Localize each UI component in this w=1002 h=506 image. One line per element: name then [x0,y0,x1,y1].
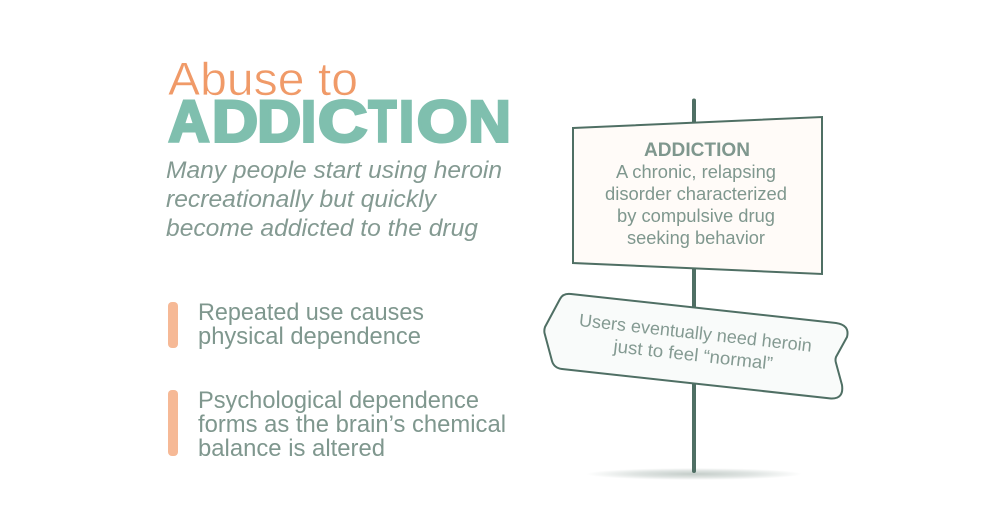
title: ADDICTION: D [257,90,301,154]
arrow board text: just to feel “normal” [612,336,774,374]
title: ADDICTION: T [368,90,396,154]
bullet text 2 [198,387,506,462]
bullet text 1: physical dependence [198,323,421,350]
arrow board text: Users eventually need heroin [578,310,813,356]
sign definition text: A chronic, relapsing [616,162,776,182]
bullet text 2: Psychological dependence [198,387,479,414]
bullet bar 2 [168,390,178,456]
bullet text 2: balance is altered [198,435,385,462]
sign board [573,117,822,274]
intro text: become addicted to the drug [166,215,479,242]
title: ADDICTION: A [168,90,210,154]
intro text: recreationally but quickly [166,186,438,213]
title: ADDICTION: O [417,90,468,154]
ground shadow [586,468,802,480]
intro text: Many people start using heroin [166,157,502,184]
title: ADDICTION: C [318,90,367,154]
bullet text 2: forms as the brain’s chemical [198,411,506,438]
title: ADDICTION: I [399,90,414,154]
signpost pole [692,100,696,471]
arrow board shape [544,294,848,399]
bullet text 1 [198,299,424,350]
bullet: physical dependence [168,299,424,350]
bullet text 1: Repeated use causes [198,299,424,326]
sign heading: ADDICTION [644,140,750,161]
intro text [166,157,502,242]
title: Abuse to: Abuse to [168,53,358,105]
sign definition text: disorder characterized [605,184,787,204]
title: ADDICTION: D [212,90,258,154]
sign: addiction definition [573,117,822,274]
title: ADDICTION: I [301,90,316,154]
sign definition text [605,162,787,248]
sign: arrow board [544,294,848,399]
title: ADDICTION: N [468,90,511,154]
sign definition text: seeking behavior [627,228,765,248]
bullet bar 1 [168,302,178,348]
bullet: psychological dependence [168,387,506,462]
sign definition text: by compulsive drug [617,206,775,226]
